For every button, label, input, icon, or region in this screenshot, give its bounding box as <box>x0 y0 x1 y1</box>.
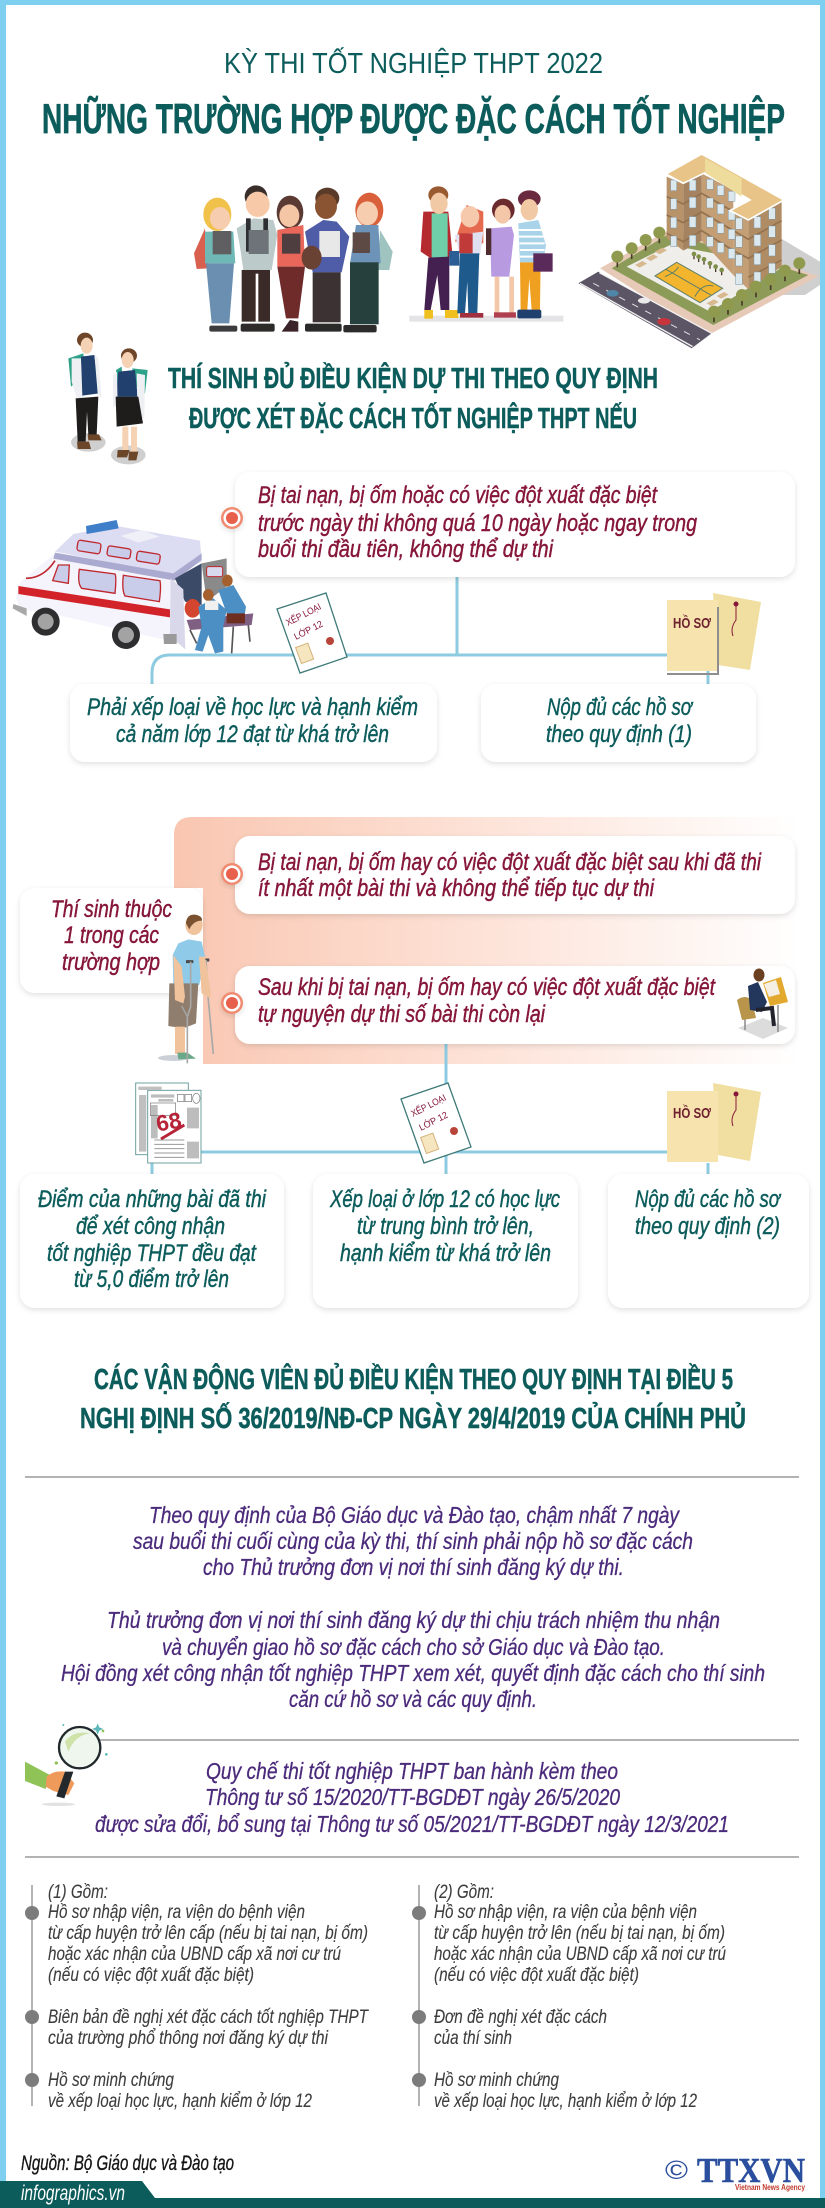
panel: documents requirement 2: Nộp đủ các hồ sơ <box>635 1186 782 1213</box>
notes: list 1: về xếp loại học lực, hạnh kiểm ở lớp 12 <box>48 2091 312 2112</box>
connector lines: case 2 <box>152 1044 708 1175</box>
stretcher <box>187 613 253 630</box>
icon: dossier 1 <box>667 593 761 674</box>
text block: regulation references: Thông tư số 15/2020/TT-BGDĐT ngày 26/5/2020 <box>205 1784 620 1810</box>
illustration: ambulance with medics <box>13 520 253 653</box>
text block: submission procedure: Theo quy định của Bộ Giáo dục và Đào tạo, chậm nhất 7 ngày <box>149 1502 680 1528</box>
illustration: student at desk <box>737 968 788 1039</box>
text block: submission procedure <box>133 1502 693 1580</box>
heading: eligible candidates: THÍ SINH ĐỦ ĐIỀU KIỆN DỰ THI THEO QUY ĐỊNH <box>168 361 658 395</box>
notes: list 1: (nếu có việc đột xuất đặc biệt) <box>48 1965 254 1986</box>
connector lines: case 1 <box>152 577 708 684</box>
panel: documents requirement 2: theo quy định (2) <box>635 1213 780 1240</box>
panel: documents requirement 1: theo quy định (1) <box>546 721 692 748</box>
plot and road <box>600 229 818 336</box>
notes: list 2: Đơn đề nghị xét đặc cách <box>434 2007 607 2028</box>
panel: documents requirement 1: Nộp đủ các hồ sơ <box>547 694 694 721</box>
notes: list 2: (2) Gồm: <box>434 1882 494 1903</box>
panel: case 1 condition: trước ngày thi không quá 10 ngày hoặc ngay trong <box>258 510 698 537</box>
benches <box>635 248 729 306</box>
icon: bullet 1 <box>221 507 243 529</box>
roof <box>666 154 784 220</box>
panel: case 2 condition b: tự nguyện dự thi số bài thi còn lại <box>258 1001 546 1028</box>
panel: case 2 condition b: Sau khi bị tai nạn, bị ốm hay có việc đột xuất đặc biệt <box>258 974 716 1001</box>
icon: grade report document 2: LỚP 12 <box>417 1110 450 1134</box>
trees <box>617 233 799 322</box>
notes: list 2: Hồ sơ nhập viện, ra viện của bệnh viện <box>434 1902 697 1923</box>
notes: list 1: Hồ sơ minh chứng <box>48 2070 174 2091</box>
icon: exam papers with score 68: 68 <box>154 1107 183 1137</box>
icon: grade report document 1: LỚP 12 <box>292 619 325 643</box>
panel: exam score requirement: tốt nghiệp THPT đều đạt <box>47 1240 257 1267</box>
panel: case 2 condition b <box>235 966 795 1044</box>
notes: list 1: (1) Gồm: <box>48 1882 108 1903</box>
notes: list 2: hoặc xác nhận của UBND cấp xã nơi cư trú <box>434 1944 726 1965</box>
footer bar <box>0 2181 825 2208</box>
notes: list 2: của thí sinh <box>434 2028 512 2049</box>
subtitle: KỲ THI TỐT NGHIỆP THPT 2022 <box>224 46 603 80</box>
panel: documents requirement 2 <box>608 1174 809 1308</box>
panel: case 1 condition <box>235 472 795 577</box>
icon: dossier 2 <box>667 1083 761 1162</box>
basketball court <box>655 262 723 303</box>
illustration: pair of uniformed students <box>68 333 148 464</box>
logo: TTXVN <box>665 2151 805 2192</box>
facades <box>667 177 683 251</box>
panel: candidate group label: 1 trong các <box>64 922 159 949</box>
logo: TTXVN: © <box>665 2155 688 2185</box>
icon: grade report document 1: XẾP LOẠI <box>284 602 323 629</box>
panel: candidate group label <box>20 888 203 993</box>
panel: candidate group label: Thí sinh thuộc <box>51 896 172 923</box>
panel: grade 12 requirement: Xếp loại ở lớp 12 có học lực <box>329 1186 560 1213</box>
panel: exam score requirement: Điểm của những bài đã thi <box>38 1186 267 1213</box>
text block: responsibility: Thủ trưởng đơn vị nơi thí sinh đăng ký dự thi chịu trách nhiệm thu nhận <box>107 1607 720 1633</box>
notes: list 1: từ cấp huyện trở lên cấp (nếu bị tai nạn, bị ốm) <box>48 1923 368 1944</box>
icon: grade report document 2 <box>401 1083 471 1163</box>
panel: candidate group label: trường hợp <box>62 949 160 976</box>
panel: case 1 condition: buổi thi đầu tiên, không thể dự thi <box>258 536 554 563</box>
panel: academic requirement: cả năm lớp 12 đạt từ khá trở lên <box>116 721 389 748</box>
panel: grade 12 requirement: hạnh kiểm từ khá trở lên <box>340 1240 551 1267</box>
panel: exam score requirement: để xét công nhận <box>76 1213 225 1240</box>
panel: case 1 condition: Bị tai nạn, bị ốm hoặc có việc đột xuất đặc biệt <box>258 482 658 509</box>
illustration: group of four students <box>409 186 563 322</box>
text block: responsibility <box>61 1607 765 1712</box>
footer bar: infographics.vn <box>21 2182 125 2205</box>
logo: TTXVN: Vietnam News Agency <box>735 2183 805 2192</box>
panel: documents requirement 1 <box>481 684 756 762</box>
icon: dossier 1: HỒ SƠ <box>673 614 711 632</box>
icon: dossier 2: HỒ SƠ <box>673 1104 711 1122</box>
heading: eligible candidates <box>168 361 658 435</box>
illustration: school building <box>578 154 820 348</box>
notes: list 1: của trường phổ thông nơi đăng ký dự thi <box>48 2028 329 2049</box>
building shadow <box>750 238 820 295</box>
panel: case 2 condition a: ít nhất một bài thi và không thể tiếp tục dự thi <box>258 875 655 902</box>
potted shrubs <box>694 253 722 275</box>
panel: academic requirement: Phải xếp loại về học lực và hạnh kiểm <box>87 694 418 721</box>
icon: magnifying glass in hand <box>25 1723 108 1806</box>
title block <box>42 46 785 142</box>
notes: list 1: hoặc xác nhận của UBND cấp xã nơi cư trú <box>48 1944 341 1965</box>
panel: academic requirement <box>70 684 437 762</box>
medics <box>218 585 246 613</box>
panel: case 2 condition a <box>235 836 795 914</box>
notes: list 1: Biên bản đề nghị xét đặc cách tốt nghiệp THPT <box>48 2007 369 2028</box>
notes: list 2 <box>412 1882 726 2112</box>
panel: exam score requirement <box>20 1174 284 1308</box>
source line: Nguồn: Bộ Giáo dục và Đào tạo <box>21 2152 234 2175</box>
panel: grade 12 requirement: từ trung bình trở lên, <box>357 1213 534 1240</box>
illustration: group of five students <box>194 185 393 332</box>
icon: grade report document 2: XẾP LOẠI <box>409 1093 448 1120</box>
windows <box>671 179 775 285</box>
illustration: student on crutches <box>158 915 213 1063</box>
panel: grade 12 requirement <box>313 1174 578 1308</box>
panel: gradient background of case 2 <box>174 817 800 1064</box>
notes: list 2: Hồ sơ minh chứng <box>434 2070 559 2091</box>
logo: TTXVN: TTXVN <box>697 2151 805 2190</box>
text block: regulation references: Quy chế thi tốt nghiệp THPT ban hành kèm theo <box>206 1758 618 1784</box>
icon: grade report document 1 <box>277 593 347 673</box>
text block: submission procedure: sau buổi thi cuối cùng của kỳ thi, thí sinh phải nộp hồ sơ đặc cách <box>133 1528 693 1554</box>
icon: bullet 3 <box>221 992 243 1014</box>
text block: responsibility: và chuyển giao hồ sơ đặc cách cho sở Giáo dục và Đào tạo. <box>162 1634 665 1660</box>
text block: responsibility: căn cứ hồ sơ và các quy định. <box>289 1686 537 1712</box>
heading: athletes <box>80 1362 746 1435</box>
icon: exam papers with score 68 <box>136 1083 201 1163</box>
text block: regulation references <box>95 1758 729 1837</box>
notes: list 1: Hồ sơ nhập viện, ra viện do bệnh viện <box>48 1902 305 1923</box>
text block: submission procedure: cho Thủ trưởng đơn vị nơi thí sinh đăng ký dự thi. <box>203 1554 624 1580</box>
panel: exam score requirement: từ 5,0 điểm trở lên <box>74 1266 229 1293</box>
notes: list 1 <box>25 1882 369 2112</box>
cars <box>607 290 619 297</box>
notes: list 2: (nếu có việc đột xuất đặc biệt) <box>434 1965 639 1986</box>
icon: bullet 2 <box>221 863 243 885</box>
notes: list 2: từ cấp huyện trở lên (nếu bị tai nạn, bị ốm) <box>434 1923 725 1944</box>
notes: list 2: về xếp loại học lực, hạnh kiểm ở lớp 12 <box>434 2091 697 2112</box>
